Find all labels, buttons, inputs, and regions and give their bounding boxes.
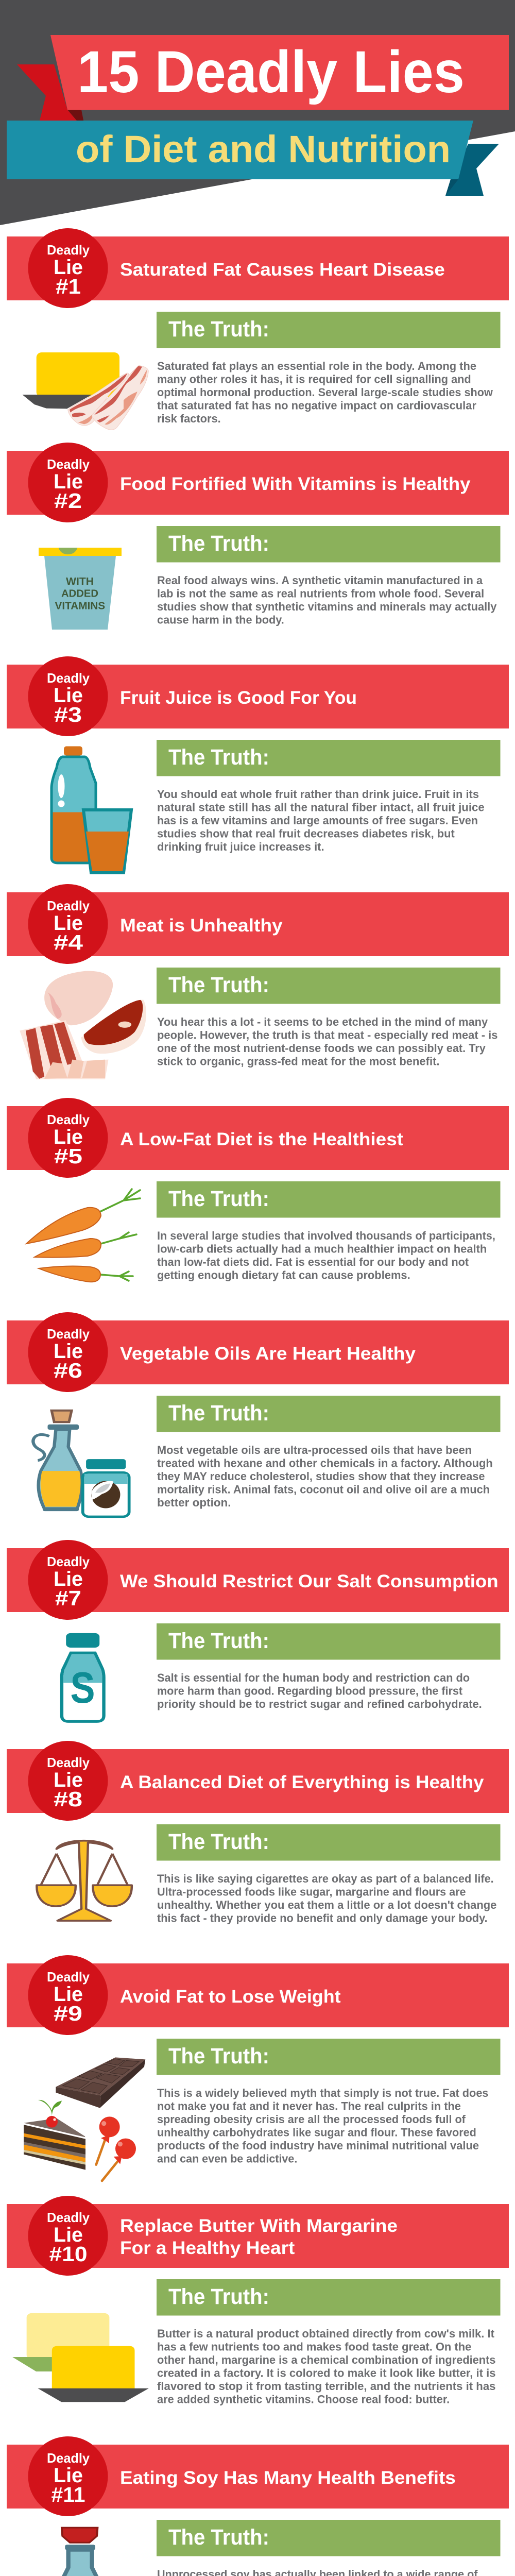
lie 11 banner (7, 2436, 509, 2516)
icon: fortified food cup: ADDED (61, 588, 98, 600)
lie 1 section (7, 228, 509, 430)
body text: more harm than good. Regarding blood pressure, the first (157, 1685, 463, 1697)
lie 4 section (7, 884, 509, 1079)
truth heading (157, 1396, 501, 1432)
lie 10 banner (7, 2196, 509, 2276)
truth heading: The Truth: (168, 2525, 269, 2550)
body text (157, 1229, 495, 1282)
icon: butter and bacon (22, 352, 148, 430)
lie 11 banner: Eating Soy Has Many Health Benefits (120, 2468, 456, 2488)
lie 6 banner (7, 1312, 509, 1392)
lie 1 banner: Saturated Fat Causes Heart Disease (120, 260, 445, 280)
truth heading: The Truth: (168, 531, 269, 556)
lie 8 banner: A Balanced Diet of Everything is Healthy (120, 1772, 484, 1792)
lie 9 banner (7, 1955, 509, 2035)
body text: studies show that real fruit decreases diabetes risk, but (157, 827, 455, 840)
body text: risk factors. (157, 412, 221, 425)
body text: stick to organic, grass-fed meat for the most benefit. (157, 1055, 440, 1067)
truth heading (157, 526, 501, 563)
lie 4 banner: #4 (54, 930, 83, 954)
body text: This is like saying cigarettes are okay as part of a balanced life. (157, 1872, 494, 1885)
truth heading: The Truth: (168, 973, 269, 997)
lie 3 banner: Lie (54, 684, 83, 707)
body text: has a few nutrients too and makes food taste great. On the (157, 2340, 471, 2353)
lie 1 banner: Deadly (47, 242, 90, 258)
lie 11 banner: #11 (52, 2483, 85, 2506)
body text: cause harm in the body. (157, 613, 284, 626)
lie 2 banner: #2 (54, 489, 82, 513)
body text: In several large studies that involved thousands of participants, (157, 1229, 495, 1242)
lie 4 banner: Meat is Unhealthy (120, 916, 283, 936)
lie 9 banner: Deadly (47, 1969, 90, 1985)
body text: Real food always wins. A synthetic vitamin manufactured in a (157, 574, 483, 587)
body text: This is a widely believed myth that simply is not true. Fat does (157, 2087, 488, 2099)
body text (157, 360, 493, 425)
truth heading (157, 2039, 501, 2075)
icon: soy sauce bottle (55, 2528, 106, 2576)
lie 3 banner: Fruit Juice is Good For You (120, 688, 357, 708)
lie 9 banner: #9 (54, 2002, 82, 2025)
header background (0, 0, 515, 225)
truth heading (157, 1824, 501, 1861)
lie 9 section (7, 1955, 509, 2181)
lie 7 banner: #7 (55, 1586, 81, 1610)
lie 4 banner: Deadly (47, 898, 90, 913)
red ribbon tail (17, 64, 85, 131)
body text: that saturated fat has no negative impact on cardiovascular (157, 399, 476, 412)
body text: this fact - they provide no benefit and only damage your body. (157, 1911, 488, 1925)
body text: they MAY reduce cholesterol, studies show that they increase (157, 1470, 485, 1483)
lie 3 banner: #3 (54, 703, 82, 726)
truth heading: The Truth: (168, 1629, 269, 1653)
body text: Salt is essential for the human body and restriction can do (157, 1671, 470, 1684)
body text: flavored to stop it from tasting terrible, and the nutrients it has (157, 2380, 495, 2393)
body text: other hand, margarine is a chemical combination of ingredients (157, 2353, 495, 2366)
body text: products of the food industry have minimal nutritional value (157, 2139, 479, 2152)
truth heading: The Truth: (168, 745, 269, 770)
truth heading (157, 740, 501, 776)
truth heading: The Truth: (168, 1187, 269, 1211)
body text: mortality risk. Animal fats, coconut oil and olive oil are a much (157, 1483, 490, 1496)
lie 8 banner: #8 (54, 1787, 82, 1811)
body text: drinking fruit juice increases it. (157, 840, 324, 853)
icon: juice bottle and glass (52, 746, 131, 873)
teal ribbon tail (445, 144, 499, 196)
truth heading (157, 1181, 501, 1218)
body text: many other roles it has, it is required for cell signalling and (157, 373, 471, 385)
icon: chocolate, cake and candy (24, 2057, 145, 2181)
lie 2 banner: Food Fortified With Vitamins is Healthy (120, 474, 471, 494)
truth heading: The Truth: (168, 2284, 269, 2309)
lie 1 banner: #1 (56, 275, 81, 298)
body text: natural state still has all the natural fiber intact, all fruit juice (157, 801, 485, 814)
lie 3 banner: Deadly (47, 670, 90, 686)
body text: treated with hexane and other chemicals in a factory. Although (157, 1457, 493, 1469)
lie 5 banner: A Low-Fat Diet is the Healthiest (120, 1129, 403, 1149)
icon: fortified food cup (39, 548, 122, 630)
lie 10 banner: For a Healthy Heart (120, 2238, 295, 2258)
lie 8 banner: Lie (54, 1769, 83, 1791)
lie 10 banner: Lie (54, 2224, 83, 2246)
body text (157, 2327, 495, 2406)
body text: Most vegetable oils are ultra-processed oils that have been (157, 1444, 472, 1456)
lie 2 banner (7, 443, 509, 522)
lie 8 banner: Deadly (47, 1755, 90, 1770)
lie 6 banner: Deadly (47, 1326, 90, 1342)
truth heading (157, 312, 501, 348)
body text: and can even be addictive. (157, 2153, 297, 2165)
icon: butter and margarine (12, 2313, 149, 2402)
body text: people. However, the truth is that meat - especially red meat - is (157, 1028, 497, 1042)
body text: priority should be to restrict sugar and refined carbohydrate. (157, 1698, 482, 1710)
lie 5 banner (7, 1098, 509, 1178)
truth heading: The Truth: (168, 1401, 269, 1426)
lie 4 banner: Lie (54, 912, 83, 935)
lie 1 banner (7, 228, 509, 308)
icon: carrots (26, 1189, 140, 1282)
body text (157, 1671, 482, 1710)
body text: than low-fat diets did. Fat is essential for our body and not (157, 1256, 469, 1268)
icon: oil bottle and coconut jar (33, 1411, 129, 1517)
lie 8 section (7, 1741, 509, 1925)
lie 5 section (7, 1098, 509, 1282)
lie 6 section (7, 1312, 509, 1517)
lie 2 banner: Deadly (47, 456, 90, 472)
body text: has is a few vitamins and large amounts of free sugars. Even (157, 814, 478, 827)
lie 11 banner: Deadly (47, 2450, 90, 2466)
lie 7 banner: Deadly (47, 1554, 90, 1569)
header title ribbons (7, 35, 509, 196)
lie 3 banner (7, 656, 509, 736)
body text (157, 574, 497, 626)
lie 8 banner (7, 1741, 509, 1821)
lie 6 banner: Vegetable Oils Are Heart Healthy (120, 1344, 416, 1364)
title: 15 Deadly Lies (77, 39, 465, 105)
body text: spreading obesity crisis are all the processed foods full of (157, 2113, 466, 2126)
body text (157, 1872, 496, 1925)
lie 2 section (7, 443, 509, 630)
lie 5 banner: Deadly (47, 1112, 90, 1127)
lie 5 banner: #5 (54, 1144, 82, 1168)
icon: fortified food cup: WITH (66, 576, 94, 587)
truth heading (157, 2279, 501, 2315)
teal subtitle ribbon (7, 121, 473, 179)
red title ribbon (50, 35, 509, 110)
body text: lab is not the same as real nutrients from whole food. Several (157, 587, 484, 600)
lie 11 section (7, 2436, 509, 2576)
body text: Saturated fat plays an essential role in the body. Among the (157, 360, 476, 372)
icon: fortified food cup: VITAMINS (55, 601, 105, 612)
body text: better option. (157, 1496, 231, 1509)
icon: salt shaker: S (70, 1664, 95, 1713)
lie 10 banner: Deadly (47, 2210, 90, 2225)
body text: one of the most nutrient-dense foods we can possibly eat. Try (157, 1042, 486, 1055)
truth heading: The Truth: (168, 2044, 269, 2069)
icon: cuts of meat (20, 971, 146, 1079)
lie 7 section (7, 1540, 509, 1721)
body text: unhealthy carbohydrates like sugar and flour. These favored (157, 2126, 476, 2139)
lie 9 banner: Avoid Fat to Lose Weight (120, 1987, 341, 2007)
body text: getting enough dietary fat can cause problems. (157, 1268, 410, 1282)
lie 4 banner (7, 884, 509, 964)
body text: optimal hormonal production. Several large-scale studies show (157, 386, 493, 399)
body text: You hear this a lot - it seems to be etched in the mind of many (157, 1015, 488, 1028)
lie 11 banner: Lie (54, 2464, 83, 2487)
body text: studies show that synthetic vitamins and minerals may actually (157, 600, 497, 613)
truth heading: The Truth: (168, 317, 269, 342)
lie 6 banner: #6 (54, 1359, 82, 1382)
lie 5 banner: Lie (54, 1126, 83, 1148)
body text: You should eat whole fruit rather than drink juice. Fruit in its (157, 788, 479, 801)
body text: Butter is a natural product obtained directly from cow's milk. It (157, 2327, 495, 2340)
lie 10 banner: #10 (49, 2242, 88, 2266)
body text: not make you fat and it never has. The real culprits in the (157, 2100, 461, 2112)
body text (157, 1444, 493, 1509)
body text: unhealthy. Whether you eat them a little or a lot doesn't change (157, 1899, 496, 1911)
body text (157, 2087, 488, 2165)
lie 1 banner: Lie (54, 256, 83, 279)
truth heading: The Truth: (168, 1829, 269, 1854)
body text: are added synthetic vitamins. Choose real food: butter. (157, 2393, 450, 2406)
body text: created in a factory. It is colored to make it look like butter, it is (157, 2367, 495, 2379)
icon: balance scales (37, 1841, 132, 1921)
lie 3 section (7, 656, 509, 873)
lie 10 section (7, 2196, 509, 2406)
body text (157, 788, 485, 853)
lie 7 banner: We Should Restrict Our Salt Consumption (120, 1571, 499, 1591)
truth heading (157, 968, 501, 1004)
lie 10 banner: Replace Butter With Margarine (120, 2216, 398, 2236)
truth heading (157, 1623, 501, 1660)
truth heading (157, 2520, 501, 2556)
body text: Ultra-processed foods like sugar, margarine and flours are (157, 1886, 466, 1898)
body text (157, 1015, 497, 1067)
body text: low-carb diets actually had a much healthier impact on health (157, 1243, 487, 1255)
lie 6 banner: Lie (54, 1340, 83, 1363)
icon: salt shaker (62, 1633, 104, 1721)
lie 7 banner: Lie (54, 1568, 83, 1590)
lie 7 banner (7, 1540, 509, 1620)
lie 2 banner: Lie (54, 470, 83, 493)
subtitle: of Diet and Nutrition (76, 128, 451, 171)
lie 9 banner: Lie (54, 1983, 83, 2006)
